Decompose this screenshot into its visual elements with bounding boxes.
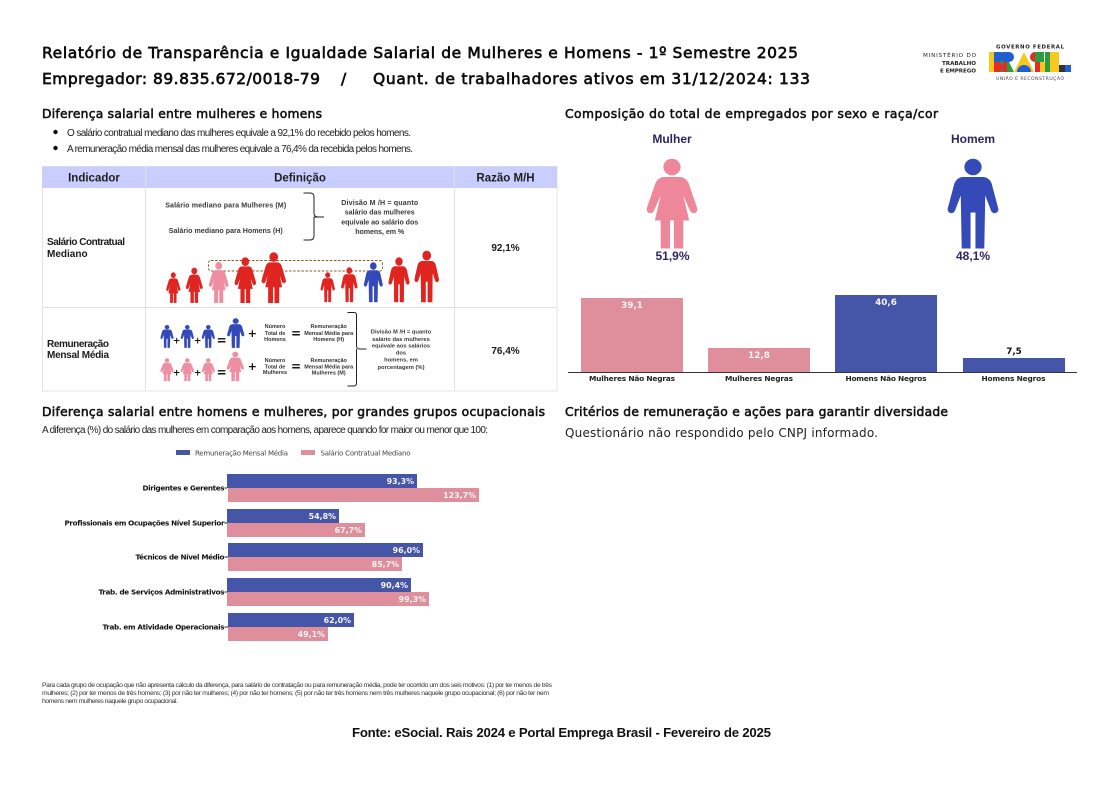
group: profissionais: 54,8% [309,512,336,521]
group: técnicos: 85,7% [372,560,399,569]
row: remuneração mensal média: Mensal Média para [304,364,354,370]
row: remuneração mensal média: Remuneração [47,339,109,350]
row: remuneração mensal média: Remuneração [311,324,348,330]
row: remuneração mensal média: Remuneração [311,358,348,364]
heading: diferença salarial: Diferença salarial entre mulheres e homens [42,107,322,121]
row: remuneração mensal média: Mulheres (M) [312,370,346,376]
row: remuneração mensal média: 76,4% [491,346,520,357]
operators: + [248,327,257,340]
bar chart: sexo e raça/cor: Homens Negros [982,374,1046,383]
title: Empregador: 89.835.672/0018-79 [42,70,320,88]
pictogram: homem: 48,1% [956,249,990,263]
icons: men by salary [321,251,439,302]
row: remuneração mensal média [47,312,520,386]
group: atividade operacionais: Trab. em Atividade Operacionais [102,622,224,632]
group: técnicos [136,543,423,571]
bar chart: sexo e raça/cor: 40,6 [875,298,897,308]
row: remuneração mensal média: equivale aos salários [372,344,430,350]
row: remuneração mensal média: homens, em [384,358,418,364]
operators: + [194,336,201,346]
group: serviços administrativos: 90,4% [381,581,408,590]
bar chart: sexo e raça/cor: Homens Não Negros [846,374,927,383]
group: serviços administrativos [98,578,429,606]
group: serviços administrativos: 99,3% [399,595,426,604]
row: remuneração mensal média: salário das mulheres [372,337,430,343]
row: salário contratual mediano: 92,1% [491,243,520,254]
bar chart: sexo e raça/cor: Mulheres Não Negras [589,374,676,383]
group: profissionais: 67,7% [335,526,362,535]
group: atividade operacionais: 49,1% [298,630,325,639]
title: / [341,70,347,88]
operators: = [291,360,301,374]
table header: Indicador [68,172,120,184]
bar chart: sexo e raça/cor: 7,5 [1006,347,1022,357]
legend [176,450,410,458]
title: Relatório de Transparência e Igualdade Salarial de Mulheres e Homens - 1º Semestre 2025 [42,44,798,62]
group: atividade operacionais: 62,0% [324,616,351,625]
row: remuneração mensal média: Mensal Média para [304,331,354,337]
group: dirigentes: 93,3% [387,477,414,486]
group: profissionais [64,509,365,537]
row: salário contratual mediano: Salário mediano para Homens (H) [169,227,283,235]
icons: men sum [161,318,244,348]
footnote: homens nem mulheres naquele grupo ocupacional. [42,698,178,705]
group: técnicos: Técnicos de Nível Médio [136,552,225,562]
pictogram: mulher: Mulher [652,132,692,146]
heading: composição: Composição do total de empregados por sexo e raça/cor [565,107,939,121]
legend: Remuneração Mensal Média [195,450,288,458]
group: serviços administrativos: Trab. de Serviços Administrativos [98,588,224,596]
title: Quant. de trabalhadores ativos em 31/12/2024: 133 [373,70,810,88]
group: dirigentes [142,474,479,502]
operators: = [291,326,301,340]
operators: + [173,368,180,378]
brace [304,193,324,240]
row: remuneração mensal média: Homens [264,337,286,343]
row: remuneração mensal média: Mensal Média [47,350,109,361]
group: dirigentes: Dirigentes e Gerentes [142,484,224,492]
row: remuneração mensal média: Total de [265,331,285,337]
pictogram: homem [948,132,998,263]
bar chart: sexo e raça/cor: 12,8 [748,351,770,361]
group: técnicos: 96,0% [393,546,420,555]
logo: ministério: E EMPREGO [940,68,976,74]
logo: ministério: TRABALHO [942,61,976,67]
row: remuneração mensal média: Número [265,324,286,330]
row: remuneração mensal média: Mulheres [263,370,287,376]
bullet list: O salário contratual mediano das mulheres equivale a 92,1% do recebido pelos homens. [67,128,411,139]
table header: Definição [274,172,326,184]
operators: = [217,366,227,380]
row: remuneração mensal média: dos [396,351,406,357]
row: salário contratual mediano: homens, em % [355,228,405,236]
brace [348,312,366,386]
pictogram: homem: Homem [951,132,995,146]
operators: + [194,368,201,378]
operators [173,326,301,380]
row: remuneração mensal média: porcentagem (%) [377,365,425,371]
pictogram: mulher: 51,9% [655,249,690,263]
operators: + [248,360,257,373]
bar chart: sexo e raça/cor: 39,1 [621,301,643,311]
footnote: Para cada grupo de ocupação que não apresenta cálculo da diferença, para salário de contratação ou para remuneração média, pode ter ocorrido um dos seis motivos: (1) por ter menos de três [42,682,553,689]
logo: governo federal brasil: UNIÃO E RECONSTRUÇÃO [996,75,1064,82]
row: salário contratual mediano [47,193,520,303]
bar chart: sexo e raça/cor: Mulheres Negras [725,374,794,383]
text: questionário: Questionário não respondido pelo CNPJ informado. [565,426,878,440]
row: salário contratual mediano: Divisão M /H = quanto [341,199,419,207]
operators: + [173,336,180,346]
legend: Salário Contratual Mediano [320,450,410,458]
logo: ministério [923,51,977,74]
row: remuneração mensal média: Divisão M /H = quanto [371,330,432,336]
row: remuneração mensal média: Homens (H) [313,337,344,343]
bullet list: A remuneração média mensal das mulheres equivale a 76,4% da recebida pelos homens. [67,144,413,155]
table header: Razão M/H [476,172,535,184]
bullet list [53,128,413,155]
table header [42,166,557,188]
bar chart: grupos ocupacionais [64,474,479,641]
row: remuneração mensal média: Número [265,358,286,364]
logo: ministério: MINISTÉRIO DO [923,51,977,59]
row: salário contratual mediano: Salário Contratual [47,237,125,248]
row: salário contratual mediano: Mediano [47,249,88,260]
heading: critérios: Critérios de remuneração e ações para garantir diversidade [565,405,948,419]
footnote [42,682,553,705]
logo: governo federal brasil: GOVERNO FEDERAL [996,44,1065,50]
panel: tabela de indicadores [42,166,557,391]
row: salário contratual mediano: Salário mediano para Mulheres (M) [165,202,287,210]
icons: women by salary [166,252,286,303]
pictogram: mulher [647,132,697,263]
row: salário contratual mediano: salário das mulheres [345,208,415,216]
heading: grupos ocupacionais: Diferença salarial entre homens e mulheres, por grandes grupos ocupacionais [42,405,545,419]
group: atividade operacionais [102,613,354,641]
source: Fonte: eSocial. Rais 2024 e Portal Emprega Brasil - Fevereiro de 2025 [352,725,771,740]
operators: = [217,334,227,348]
bar chart: sexo e raça/cor [568,295,1077,383]
footnote: mulheres; (2) por ter menos de três homens; (3) por não ter mulheres; (4) por não ter homens; (5) por não ter três homens nem três mulheres naquele grupo ocupacional; (6) por não ter nem [42,690,549,697]
row: salário contratual mediano: equivale ao salário dos [341,218,418,226]
group: dirigentes: 123,7% [443,491,476,500]
row: remuneração mensal média: Total de [265,364,285,370]
logo: governo federal brasil [989,44,1071,82]
subtitle: A diferença (%) do salário das mulheres em comparação aos homens, aparece quando for maior ou menor que 100: [42,425,488,436]
group: profissionais: Profissionais em Ocupações Nível Superior [64,518,225,528]
dashed median box [208,260,382,271]
icons: women sum [161,352,244,381]
title [42,44,810,88]
